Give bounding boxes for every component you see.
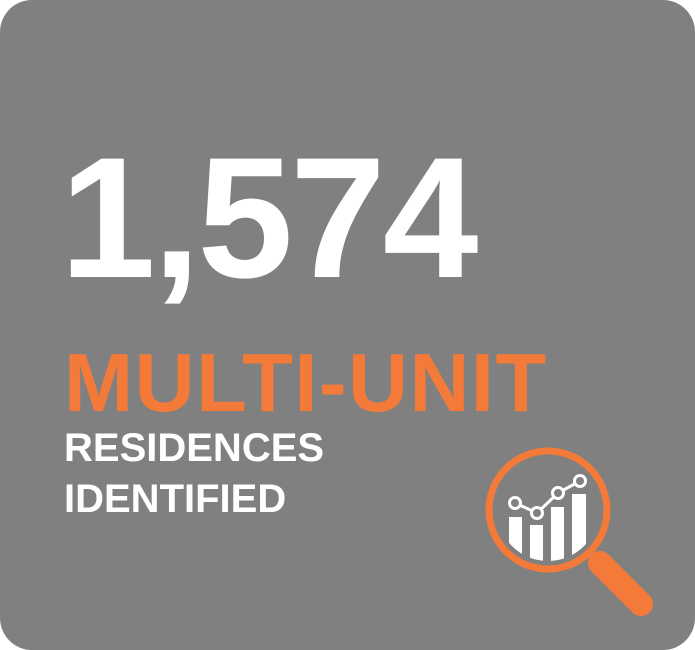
big number: 1,574 <box>60 122 475 314</box>
icon: magnifier with chart <box>486 448 653 616</box>
text: identified: IDENTIFIED <box>64 477 286 521</box>
text: residences: RESIDENCES <box>64 426 324 470</box>
heading: multi-unit: MULTI-UNIT <box>64 336 548 429</box>
